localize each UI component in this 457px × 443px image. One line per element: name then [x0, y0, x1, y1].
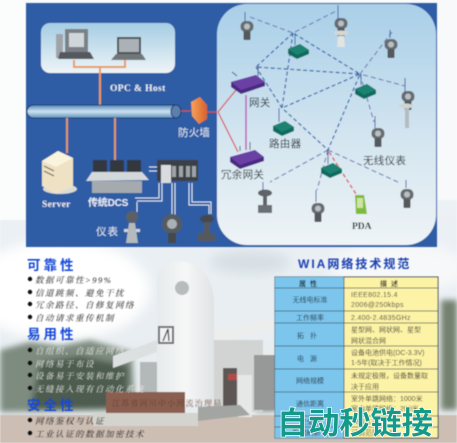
icon: server [42, 151, 77, 194]
list: security: 工业认证的数据加密技术 [35, 429, 145, 439]
panel: wireless network [217, 4, 436, 245]
table left column: 电源 [297, 354, 323, 363]
icon: gateways [230, 66, 265, 169]
table right column: 室外单跳网络：1000米 [351, 394, 423, 403]
label: OPC and Host: OPC & Host [110, 84, 166, 94]
table left column: 无线电标准 [292, 295, 328, 304]
table left column: 通信距离 [296, 399, 324, 408]
table right column: 未规定极限，设备数量取 [351, 371, 428, 380]
table right column: 描述 [380, 279, 402, 288]
icon: desktop computer [56, 29, 94, 59]
table left column: 拓扑 [297, 331, 323, 340]
icon: PDA [355, 195, 367, 214]
icon: firewall [191, 97, 207, 124]
table right column [351, 279, 428, 437]
table right column: AES-128 [351, 419, 379, 426]
list: reliability: 数据可靠性>99% [35, 275, 112, 285]
table right column: 2006@250kbps [351, 302, 404, 309]
trees [0, 300, 457, 412]
mesh links [256, 33, 360, 150]
table left column: 网络规模 [296, 376, 324, 385]
label: server: Server [42, 200, 71, 210]
label: gateway: 网关 [249, 96, 271, 109]
table right column: 2.400-2.4835GHz [351, 315, 411, 322]
icon: laptop [111, 37, 146, 60]
list: reliability [28, 275, 135, 323]
table left column: 安全性 [300, 417, 320, 426]
wired gateway links [218, 90, 238, 152]
text block: features [27, 257, 145, 439]
list: ease of use: 无缝接入现有自动化系统 [35, 384, 145, 394]
heading: ease of use: 易用性 [27, 326, 76, 342]
sign wall: 江苏省河川中小河流治理局 [112, 398, 222, 408]
table left column: 工作频率 [296, 313, 324, 322]
list: security: 网络鉴权与认证 [35, 416, 105, 426]
network bus pipe [27, 105, 181, 118]
watermark: 自动秒链接 [277, 406, 433, 441]
icon: wireless instruments [240, 5, 414, 222]
label: instruments: 仪表 [96, 225, 119, 238]
list: ease of use: 自组织、自适应网络 [35, 346, 125, 356]
table right column: 可调范围1s-1h [351, 428, 397, 437]
icon: transmitter [162, 214, 182, 243]
heading: reliability: 可靠性 [27, 257, 76, 273]
list: ease of use [28, 346, 145, 394]
table left column [292, 279, 328, 437]
icon: routers [273, 33, 376, 178]
label: router: 路由器 [269, 137, 302, 150]
table right column: IEEE802.15.4 [351, 292, 398, 299]
table: WIA spec [275, 277, 438, 438]
icon: radar level instrument [124, 211, 140, 243]
list: reliability: 自动请求重传机制 [35, 313, 115, 323]
label: redundant gateway: 冗余网关 [221, 168, 264, 181]
label: wireless instruments: 无线仪表 [363, 154, 406, 167]
table right column: 网状混合网 [351, 336, 386, 345]
table right column: 设备电池供电(DC-3.3V) [351, 348, 425, 357]
label: PDA: PDA [352, 222, 372, 232]
list: reliability: 信道跳频、避免干扰 [35, 288, 125, 298]
list: ease of use: 设备易于安装和维护 [35, 371, 125, 381]
list: security [28, 416, 145, 439]
table right column: 决于应用 [351, 382, 379, 391]
sign wall [93, 392, 222, 426]
panel: OPC hosts [41, 23, 175, 105]
panel: plant network [26, 3, 437, 247]
icon: DCS console [86, 160, 149, 193]
icon: valve [198, 215, 215, 241]
table right column: 星型网、网状网、星型 [351, 325, 421, 334]
building [113, 261, 277, 417]
logo [158, 326, 174, 344]
table left column: 属性 [299, 279, 321, 288]
list: ease of use: 网络易于布设 [35, 359, 95, 369]
ground [0, 415, 457, 443]
heading: WIA spec: WIA网络技术规范 [298, 256, 411, 271]
icon: IO rack [157, 160, 198, 183]
heading: security: 安全性 [27, 397, 76, 413]
table left column: 数据刷新率 [292, 428, 328, 437]
table right column: 1-5年(取决于工作情况) [351, 358, 422, 367]
table right column: 室内单跳网络：200米 [351, 404, 419, 413]
list: reliability: 冗余路径、自修复网络 [35, 300, 135, 310]
label: DCS: 传统DCS [88, 196, 129, 209]
label: firewall: 防火墙 [178, 126, 210, 139]
